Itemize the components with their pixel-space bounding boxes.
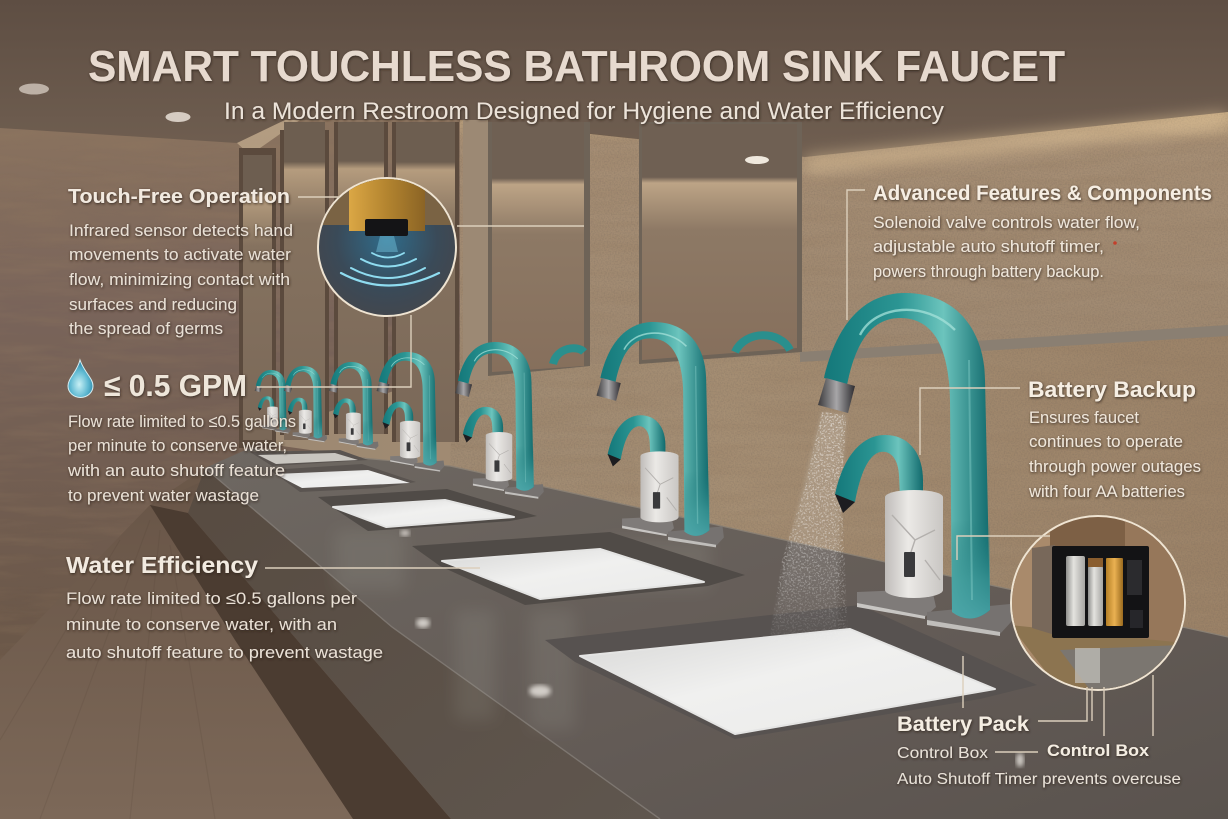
- text block: battery pack and control box: [897, 713, 1181, 788]
- title: SMART TOUCHLESS BATHROOM SINK FAUCET: [88, 42, 1065, 91]
- backsplash: [240, 325, 1228, 640]
- wall corner glow: [237, 120, 300, 155]
- flow rate figure: ≤ 0.5 GPM: [104, 368, 247, 403]
- counter shadow on floor: [150, 505, 451, 819]
- text block: touch-free operation: the spread of germs: [69, 319, 223, 338]
- text block: advanced features: [873, 182, 1212, 281]
- ceiling lights: [19, 84, 769, 164]
- sinks: [250, 450, 1037, 739]
- text block: battery backup: Ensures faucet: [1029, 409, 1139, 427]
- heading: water efficiency: Water Efficiency: [66, 552, 258, 578]
- text block: advanced features: powers through battery backup.: [873, 263, 1104, 281]
- text block: touch-free operation: Infrared sensor detects hand: [69, 221, 293, 240]
- text block: water efficiency: [66, 552, 383, 662]
- callout circle: infrared sensor: [317, 175, 457, 317]
- icon: water drop: [68, 360, 93, 398]
- text block: flow rate: Flow rate limited to ≤0.5 gallons: [68, 412, 296, 431]
- text block: touch-free operation: flow, minimizing contact with: [69, 270, 290, 289]
- text block: flow rate: with an auto shutoff feature: [67, 461, 285, 480]
- left wall: [0, 120, 470, 660]
- heading: battery pack: Battery Pack: [897, 713, 1029, 736]
- text block: flow rate: to prevent water wastage: [68, 486, 259, 505]
- text block: touch-free operation: [68, 186, 293, 338]
- text block: touch-free operation: surfaces and reducing: [69, 295, 237, 314]
- heading: battery backup: Battery Backup: [1028, 377, 1196, 402]
- mirrors: [239, 120, 802, 448]
- counter reflections: [335, 530, 710, 730]
- text block: advanced features: Solenoid valve controls water flow,: [873, 214, 1140, 232]
- main faucet with water spray: [760, 293, 1012, 650]
- text block: water efficiency: Flow rate limited to ≤0.5 gallons per: [66, 589, 357, 608]
- text block: advanced features: adjustable auto shutoff timer,: [873, 238, 1104, 256]
- text block: battery backup: with four AA batteries: [1028, 483, 1185, 501]
- red mark: [1113, 241, 1117, 245]
- water spray: [770, 412, 848, 636]
- leader lines: [257, 190, 1153, 752]
- text block: water efficiency: auto shutoff feature to prevent wastage: [66, 643, 383, 662]
- text block: battery backup: through power outages: [1029, 458, 1201, 476]
- right wall upper: [460, 112, 1228, 380]
- wall glow: [805, 112, 1228, 173]
- floor: [0, 480, 451, 819]
- heading: touch-free operation: Touch-Free Operation: [68, 186, 290, 208]
- text block: battery backup: continues to operate: [1029, 433, 1183, 451]
- subtitle: In a Modern Restroom Designed for Hygiene and Water Efficiency: [224, 98, 944, 125]
- text block: water efficiency: minute to conserve water, with an: [66, 615, 337, 634]
- text block: flow rate: [67, 412, 296, 505]
- text block: battery backup: [1028, 377, 1201, 501]
- ledge: [800, 325, 1228, 362]
- text block: battery pack and control box: Auto Shutoff Timer prevents overcuse: [897, 771, 1181, 788]
- counter: [205, 448, 1228, 819]
- text block: battery pack and control box: Control Box: [897, 745, 988, 762]
- mirror faucet reflections: [553, 348, 584, 364]
- text block: touch-free operation: movements to activate water: [69, 245, 291, 264]
- text block: battery pack and control box: Control Box: [1047, 741, 1150, 760]
- heading: advanced features: Advanced Features & Components: [873, 182, 1212, 205]
- text block: flow rate: per minute to conserve water,: [68, 436, 287, 455]
- counter highlights: [400, 530, 1024, 767]
- floor planks: [0, 520, 215, 819]
- callout circle: battery pack: [1010, 515, 1186, 691]
- faucet row: [255, 322, 724, 547]
- ceiling: [0, 0, 1228, 157]
